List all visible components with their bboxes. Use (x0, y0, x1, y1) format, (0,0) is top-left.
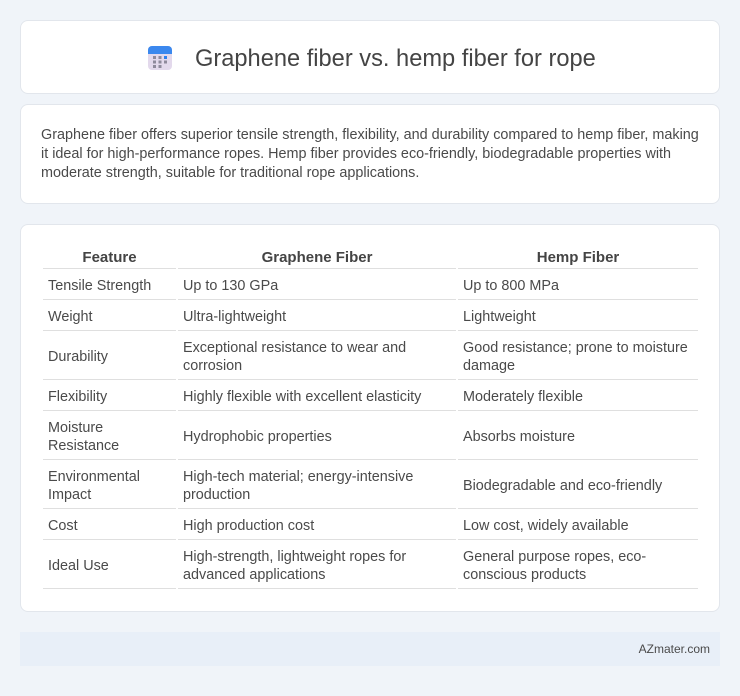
row: ideal use: Ideal Use (48, 558, 109, 574)
row: environmental impact: Impact (48, 487, 91, 503)
row: weight: Weight (48, 309, 93, 325)
intro text (41, 127, 699, 181)
row: cost: Cost (48, 518, 78, 534)
text: High-strength, lightweight ropes for (183, 549, 406, 565)
table header: feature: Feature (82, 249, 137, 266)
text: corrosion (183, 358, 242, 374)
text: Highly flexible with excellent elasticity (183, 389, 421, 405)
text: Moderately flexible (463, 389, 583, 405)
intro text: moderate strength, suitable for traditional rope applications. (41, 165, 419, 181)
intro text: Graphene fiber offers superior tensile strength, flexibility, and durability compared to hemp fiber, making (41, 127, 699, 143)
comparison table panel (20, 224, 720, 612)
text: Hydrophobic properties (183, 429, 332, 445)
row: moisture resistance (48, 420, 119, 454)
title: Graphene fiber vs. hemp fiber for rope (195, 46, 596, 72)
text: Exceptional resistance to wear and (183, 340, 406, 356)
text: High production cost (183, 518, 314, 534)
table header: graphene fiber: Graphene Fiber (262, 249, 372, 266)
text: Ultra-lightweight (183, 309, 286, 325)
text: Absorbs moisture (463, 429, 575, 445)
text: advanced applications (183, 567, 325, 583)
text: General purpose ropes, eco- (463, 549, 646, 565)
row: moisture resistance: Moisture (48, 420, 103, 436)
text: Lightweight (463, 309, 536, 325)
row: environmental impact: Environmental (48, 469, 140, 485)
footer bar (20, 632, 720, 666)
text: Biodegradable and eco-friendly (463, 478, 662, 494)
row: moisture resistance: Resistance (48, 438, 119, 454)
text: Low cost, widely available (463, 518, 629, 534)
text: Good resistance; prone to moisture (463, 340, 688, 356)
intro text panel (20, 104, 720, 204)
row: flexibility: Flexibility (48, 389, 107, 405)
text: Up to 130 GPa (183, 278, 278, 294)
row: environmental impact (48, 469, 140, 503)
icon: calendar (148, 46, 172, 70)
text: High-tech material; energy-intensive (183, 469, 413, 485)
row: durability: Durability (48, 349, 108, 365)
text: damage (463, 358, 515, 374)
intro text: it ideal for high-performance ropes. Hemp fiber provides eco-friendly, biodegradable properties with (41, 146, 671, 162)
text: Up to 800 MPa (463, 278, 559, 294)
row: tensile strength: Tensile Strength (48, 278, 151, 294)
footer source text: AZmater.com (639, 642, 710, 656)
header panel (20, 20, 720, 94)
text: conscious products (463, 567, 586, 583)
table header: hemp fiber: Hemp Fiber (537, 249, 619, 266)
text: production (183, 487, 250, 503)
